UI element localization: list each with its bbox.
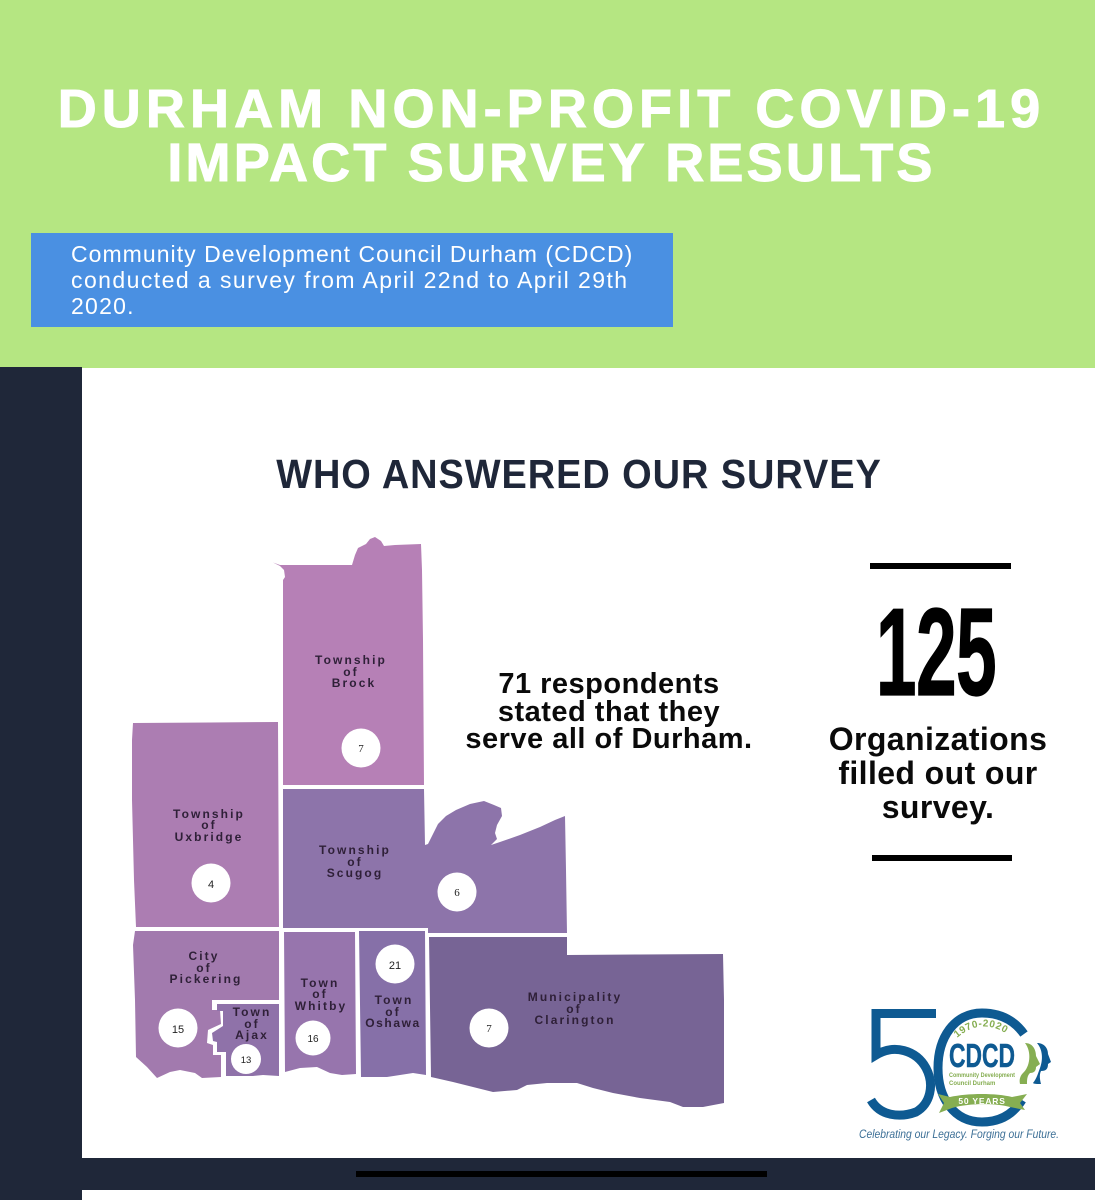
title [58,79,1045,193]
dark sidebar [0,367,82,1200]
region: Municipality of Clarington [429,937,724,1107]
region: Municipality of Clarington: of [566,1002,582,1016]
callout: 71 respondents [465,668,753,755]
region: Township of Scugog: Township [319,843,391,857]
region: Municipality of Clarington: Municipality [528,990,622,1004]
intro text box: conducted a survey from April 22nd to April 29th [71,267,629,293]
region: Township of Brock: Township [315,653,387,667]
region: Township of Scugog: Scugog [327,866,383,880]
50 years ribbon [938,1094,1027,1113]
numeral 5 [871,1014,936,1115]
intro text box [31,233,673,327]
year arc [957,1026,1010,1038]
region: Municipality of Clarington: Clarington [534,1013,616,1027]
region: City of Pickering: 15 [172,1024,184,1036]
region: Town of Whitby: Town [301,976,339,990]
region: Town of Oshawa: Town [375,993,413,1007]
region: Town of Whitby [284,932,356,1075]
region: Township of Brock: 7 [358,743,364,755]
region: Township of Uxbridge [132,722,279,927]
region: Town of Oshawa: of [385,1005,401,1019]
stat caption: Organizations [829,721,1047,757]
stat block: 125 organizations [829,563,1047,861]
region: Town of Oshawa: 21 [389,960,401,972]
region: City of Pickering [133,931,279,1078]
stat caption: survey. [882,789,994,825]
white backing for badge [944,1018,1024,1114]
region: City of Pickering: of [196,961,212,975]
region: Town of Ajax: 13 [241,1055,251,1066]
CDCD wordmark: CDCD [949,1037,1015,1074]
callout: 71 respondents: stated that they [498,696,720,728]
title: IMPACT SURVEY RESULTS [167,133,936,193]
callout: 71 respondents: serve all of Durham. [465,723,753,755]
region: Town of Whitby: 16 [307,1034,319,1045]
region: Town of Whitby: of [312,987,328,1001]
footer black bar [356,1171,767,1177]
region: Township of Brock: of [343,665,359,679]
region: Township of Scugog: of [347,855,363,869]
region: Township of Uxbridge: Uxbridge [175,830,243,844]
dark footer band [82,1158,1095,1190]
region: Township of Scugog: 6 [454,887,460,899]
region: Town of Ajax: Town [233,1005,271,1019]
region: City of Pickering: Pickering [170,972,242,986]
region: Town of Ajax: Ajax [235,1028,269,1042]
bottom rule [872,855,1012,861]
stat caption [829,721,1047,825]
logo: CDCD 50 years [859,1008,1059,1141]
stat caption: filled out our [838,755,1038,791]
region: Township of Uxbridge: of [201,818,217,832]
region: Township of Scugog [283,789,567,933]
intro text box: 2020. [71,293,135,319]
big number: 125 [876,584,996,722]
logo: CDCD 50 years: 1970-2020 [954,1020,1008,1038]
section heading: WHO ANSWERED OUR SURVEY [276,451,882,497]
region: Township of Uxbridge: Township [173,807,245,821]
region: City of Pickering: City [188,949,220,963]
region: Township of Brock [273,537,424,785]
green header panel [0,0,1095,368]
region: Town of Whitby: Whitby [295,999,347,1013]
numeral 0 ring [938,1013,1024,1122]
region: Township of Brock: Brock [332,676,376,690]
region: Town of Oshawa: Oshawa [365,1016,421,1030]
region: Town of Ajax: of [244,1017,260,1031]
50 years ribbon: 50 YEARS [958,1096,1006,1106]
region: Township of Uxbridge: 4 [208,879,214,891]
head silhouettes [1020,1043,1051,1084]
intro text box: Community Development Council Durham (CDCD) [71,241,633,267]
region: Town of Oshawa [359,931,426,1077]
callout: 71 respondents: 71 respondents [498,668,720,700]
organization name: Community Development [949,1073,1015,1079]
region: Municipality of Clarington: 7 [486,1023,492,1035]
top rule [870,563,1011,569]
title: DURHAM NON-PROFIT COVID-19 [58,79,1045,139]
logo: CDCD 50 years: Council Durham [949,1081,995,1087]
region: Town of Ajax [212,1004,279,1076]
